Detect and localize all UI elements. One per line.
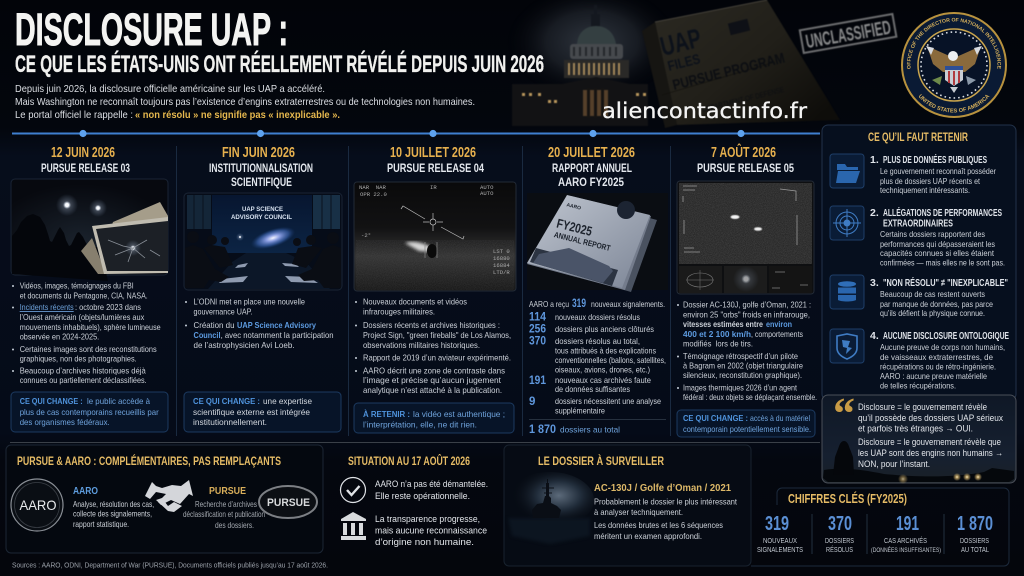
- subtitle: CE QUE LES ÉTATS-UNIS ONT RÉELLEMENT RÉVÉLÉ DEPUIS JUIN 2026: [15, 50, 544, 78]
- statistics list: oiseaux, avions, drones, etc.): [555, 364, 650, 374]
- heading: CE QU’IL FAUT RETENIR: [868, 130, 968, 144]
- transparency text: [375, 514, 487, 547]
- panel: situation au 17 aout 2026: [340, 453, 488, 547]
- statistics list: nouveaux dossiers résolus: [555, 312, 640, 322]
- image: annual report: ANNUAL REPORT: [553, 230, 612, 253]
- bullet list: [185, 296, 334, 350]
- item 1: plus de donnees publiques: 1.: [870, 154, 879, 166]
- quote text: les UAP sont des engins non humains →: [858, 448, 1003, 458]
- callout: ce qui change: [11, 392, 168, 432]
- image: advisory council room: ADVISORY COUNCIL: [231, 214, 292, 221]
- heading: SCIENTIFIQUE: [231, 177, 292, 189]
- statistics list: 256: [529, 324, 546, 336]
- bullet list: graphiques, non des photographies.: [20, 354, 137, 364]
- bullet list: l’image et précise qu’aucun jugement: [363, 375, 502, 385]
- callout: a retenir: À RETENIR :: [363, 409, 410, 419]
- icon: ODNI seal: UNITED STATES OF AMERICA: [919, 94, 990, 112]
- statistics list: dossiers nécessitent une analyse: [555, 396, 661, 406]
- panel: le dossier a surveiller: [504, 445, 751, 566]
- item 3: non resolu: 3.: [870, 277, 879, 289]
- bullet list: silencieux, reconstitution graphique).: [683, 370, 802, 380]
- callout: ce qui change: CE QUI CHANGE :: [683, 413, 748, 423]
- bullet list: , comportements: [751, 329, 803, 339]
- stat: dossiers resolus: 370: [828, 513, 852, 535]
- icon: check mark: [340, 478, 366, 502]
- date: 7 AOÛT 2026: [711, 143, 776, 161]
- callout: ce qui change: scientifique externe est intégrée: [193, 407, 310, 417]
- image: infrared video frame: AUTO: [480, 184, 494, 191]
- callout: ce qui change: des organismes fédéraux.: [20, 417, 110, 427]
- callout: ce qui change: CE QUI CHANGE :: [193, 396, 260, 406]
- callout: ce qui change: [184, 392, 341, 432]
- bullet list: [677, 300, 817, 402]
- timeline: [12, 130, 820, 137]
- quote text: Disclosure = le gouvernement révèle que: [858, 437, 1001, 447]
- image: infrared video frame: LTD/R: [493, 269, 510, 276]
- bullet list: Création du: [194, 320, 235, 330]
- bullet list: 400 et 2 100 km/h: [683, 329, 751, 339]
- item 1: plus de donnees publiques: Le gouvernement reconnaît posséder: [880, 166, 996, 176]
- folder title text: DEPARTMENT OF DEFENSE: [701, 85, 785, 114]
- heading: PURSUE RELEASE 04: [387, 163, 484, 175]
- item 3: non resolu: [830, 275, 1008, 318]
- statistics list: dossiers résolus au total,: [555, 336, 640, 346]
- quote text: NON, pour l’instant.: [858, 459, 930, 469]
- stat: nouveaux signalements: SIGNALEMENTS: [757, 547, 803, 554]
- bullet list: Images thermiques 2026 d’un agent: [683, 382, 798, 392]
- intro text: Depuis juin 2026, la disclosure officielle américaine sur les UAP a accéléré.: [15, 84, 325, 95]
- item 1: plus de donnees publiques: plus de dossiers UAP récents et: [880, 176, 981, 186]
- statistics list: conventionnelles (ballons, satellites,: [555, 355, 666, 365]
- bullet list: de l’astrophysicien Avi Loeb.: [194, 340, 294, 350]
- folder title text: [657, 23, 787, 114]
- callout: a retenir: [354, 403, 514, 433]
- callout: ce qui change: le public accède à: [87, 396, 150, 406]
- case text: AC-130J / Golfe d’Oman / 2021: [594, 483, 731, 494]
- stat: cas archives: (DONNÉES INSUFFISANTES): [871, 545, 941, 554]
- icon: folder: [830, 154, 864, 188]
- item 2: allegations de performances: 2.: [870, 207, 879, 219]
- PURSUE description: Recherche d’archives: [195, 499, 257, 509]
- bullet list: Certaines images sont des reconstitutions: [20, 344, 157, 354]
- bullet list: analytique n’est attaché à la publication.: [363, 385, 502, 395]
- statistics list: dossiers au total: [560, 424, 620, 434]
- image: annual report: AARO: [566, 202, 582, 212]
- item 4: aucune disclosure ontologique: Aucune preuve de corps non humains,: [880, 342, 1005, 352]
- bullet list: infrarouges militaires.: [363, 306, 435, 316]
- quote text: Disclosure = le gouvernement révèle: [858, 402, 987, 412]
- statistics list: AARO a reçu: [529, 299, 569, 309]
- folder title text: FILES: [666, 50, 702, 74]
- panel: pursue et aaro: [6, 445, 323, 553]
- image: infrared video frame: OPR 22.0: [360, 191, 387, 198]
- AARO description: collecte des signalements,: [73, 508, 152, 518]
- stat: cas archives: 191: [896, 513, 919, 535]
- intro text: Le portal officiel le rappelle :: [15, 110, 133, 121]
- callout: ce qui change: contemporain potentiellement sensible.: [683, 424, 811, 434]
- statistics list: nouveaux cas archivés faute: [555, 375, 651, 385]
- case text: Probablement le dossier le plus intéressant: [594, 496, 738, 506]
- bullet list: , avec notamment la participation: [221, 330, 334, 340]
- panel: ce qu'il faut retenir: [822, 125, 1016, 400]
- bullet list: AARO décrit une zone de contraste dans: [363, 366, 505, 376]
- item 2: allegations de performances: confirmées — mais elles ne le sont pas.: [880, 258, 1005, 268]
- icon: ODNI seal: [901, 12, 1007, 118]
- bullet list: observée en 2024-2025.: [20, 332, 99, 342]
- quote text: et parfois très étranges → OUI.: [858, 424, 973, 434]
- statistics list: 319: [572, 298, 586, 310]
- bullet list: Rapport de 2019 d’un aviateur expérimenté.: [363, 352, 511, 362]
- icon: institution: [341, 512, 366, 540]
- bullet list: Beaucoup d’archives historiques déjà: [20, 366, 146, 376]
- intro text: Mais Washington ne reconnaît toujours pas l’existence d’engins extraterrestres ou de technologies non humaines.: [15, 97, 475, 108]
- AARO description: [73, 485, 154, 529]
- bullet list: connues ou partiellement déclassifiées.: [20, 375, 147, 385]
- statistics list: 1 870: [529, 424, 556, 436]
- heading: CHIFFRES CLÉS (FY2025): [788, 491, 907, 506]
- callout: ce qui change: plus de cas contemporains recueillis par: [20, 407, 159, 417]
- PURSUE description: déclassification et publication: [183, 509, 265, 519]
- AARO description: Analyse, résolution des cas,: [73, 499, 154, 509]
- bullet list: : octobre 2023 dans: [75, 302, 141, 312]
- icon: ODNI seal: OFFICE OF THE DIRECTOR OF NATIONAL INTELLIGENCE: [906, 18, 1002, 69]
- heading: [209, 163, 313, 189]
- panel: fin juin 2026: [184, 145, 342, 432]
- bullet list: environ: [766, 319, 792, 329]
- callout: ce qui change: institutionnellement.: [193, 417, 267, 427]
- item 3: non resolu: par manque de données, pas parce: [880, 299, 993, 309]
- bullet list: et documents du Pentagone, CIA, NASA.: [20, 290, 148, 300]
- statistics list: supplémentaire: [555, 406, 605, 416]
- watermark: aliencontactinfo.fr: [602, 99, 807, 123]
- bullet list: Vidéos, images, témoignages du FBI: [20, 280, 134, 290]
- item 1: plus de donnees publiques: [830, 153, 996, 195]
- heading: RAPPORT ANNUEL: [552, 163, 632, 175]
- item 1: plus de donnees publiques: techniquement intéressants.: [880, 185, 970, 195]
- bullet list: L’ODNI met en place une nouvelle: [194, 296, 305, 306]
- bullet list: Dossier AC-130J, golfe d’Oman, 2021 :: [683, 300, 811, 310]
- stat: nouveaux signalements: NOUVEAUX: [763, 538, 797, 545]
- image: infrared video frame: [354, 182, 516, 291]
- image: infrared video frame: 16880: [493, 255, 510, 262]
- status text: [375, 479, 488, 501]
- stat: dossiers au total: [957, 513, 993, 554]
- image: infrared video frame: AUTO: [480, 190, 494, 197]
- image: infrared video frame: NAR NAR: [359, 184, 386, 191]
- icon: quotation mark: “: [833, 389, 855, 438]
- sources: Sources : AARO, ODNI, Department of War (PURSUE), Documents officiels publiés jusqu’au 17 août 2026.: [12, 560, 328, 570]
- statistics list: 370: [529, 336, 546, 348]
- image: advisory council room: [184, 193, 342, 290]
- item 4: aucune disclosure ontologique: de telles récupérations.: [880, 380, 956, 390]
- stat: nouveaux signalements: [757, 513, 803, 554]
- stat: cas archives: CAS ARCHIVÉS: [884, 536, 927, 545]
- bullet list: modifiés lors de tirs.: [683, 338, 753, 348]
- image: advisory council room: UAP SCIENCE: [242, 206, 284, 213]
- bullet list: Council: [194, 330, 220, 340]
- stat: dossiers resolus: [825, 513, 854, 554]
- icon: PURSUE logo: [259, 486, 317, 518]
- panel: 10 juillet 2026: [354, 145, 516, 433]
- icon: shield: [830, 329, 864, 363]
- case text: [594, 483, 738, 541]
- status text: AARO n’a pas été démantelée.: [375, 479, 488, 489]
- panel: quote on disclosure: [822, 389, 1016, 484]
- bullet list: Dossiers récents et archives historiques :: [363, 320, 500, 330]
- heading: [552, 163, 632, 189]
- heading: LE DOSSIER À SURVEILLER: [538, 453, 664, 468]
- title: DISCLOSURE UAP :: [15, 4, 288, 55]
- transparency text: La transparence progresse,: [375, 514, 480, 524]
- bullet list: à Bagram en 2002 (objet triangulaire: [683, 360, 803, 370]
- header image: Capitol at night: [508, 0, 676, 126]
- icon: database: [830, 275, 864, 309]
- callout: ce qui change: une expertise: [263, 396, 312, 406]
- case text: Les données brutes et les 6 séquences: [594, 520, 723, 530]
- header image: UAP files folder: [642, 0, 840, 128]
- date: 10 JUILLET 2026: [390, 145, 476, 161]
- item 4: aucune disclosure ontologique: [830, 329, 1009, 390]
- image: infrared video frame: 16884: [493, 262, 510, 269]
- callout: ce qui change: CE QUI CHANGE :: [20, 396, 83, 406]
- statistics list: [529, 298, 666, 436]
- bullet list: Nouveaux documents et vidéos: [363, 296, 467, 306]
- bullet list: vitesses estimées entre: [683, 319, 763, 329]
- transparency text: d’origine non humaine.: [375, 537, 474, 547]
- heading: PURSUE & AARO : COMPLÉMENTAIRES, PAS REMPLAÇANTS: [17, 453, 281, 468]
- PURSUE description: [183, 485, 265, 530]
- transparency text: mais aucune reconnaissance: [375, 526, 487, 536]
- panel: chiffres cles: [751, 488, 1009, 566]
- image: lights over trees and photos: [11, 179, 168, 281]
- item 2: allegations de performances: capacités connues si elles étaient: [880, 248, 995, 258]
- bullet list: Incidents récents: [20, 302, 74, 312]
- intro text: « non résolu » ne signifie pas « inexplicable ».: [135, 110, 340, 121]
- status text: Elle reste opérationnelle.: [375, 491, 470, 501]
- statistics list: 114: [529, 312, 547, 324]
- bullet list: [355, 296, 511, 395]
- item 4: aucune disclosure ontologique: AARO : aucune preuve matérielle: [880, 371, 987, 381]
- statistics list: nouveaux signalements.: [591, 299, 665, 309]
- panel: 20 juillet 2026: [527, 145, 668, 436]
- bullet list: Témoignage rétrospectif d’un pilote: [683, 351, 798, 361]
- stamp: unclassified: [800, 14, 897, 54]
- icon: AARO logo: [11, 479, 63, 531]
- statistics list: tous attribués à des explications: [555, 346, 656, 356]
- AARO description: AARO: [73, 485, 98, 497]
- callout: ce qui change: [677, 410, 815, 437]
- callout: a retenir: la vidéo est authentique ;: [413, 409, 505, 419]
- bullet list: [12, 280, 161, 385]
- stat: dossiers au total: 1 870: [957, 513, 993, 535]
- callout: ce qui change: accès à du matériel: [750, 413, 810, 423]
- image: warship at sea: [506, 472, 594, 544]
- item 4: aucune disclosure ontologique: de vaisseaux extraterrestres, de: [880, 352, 993, 362]
- image: annual report: FY2025: [555, 216, 594, 239]
- case text: méritent un examen approfondi.: [594, 531, 702, 541]
- folder title text: PURSUE PROGRAM: [671, 51, 787, 94]
- bullet list: environ 25 "orbs" froids en infrarouge,: [683, 310, 810, 320]
- callout: a retenir: l’interprétation, elle, ne dit rien.: [363, 420, 477, 430]
- item 2: allegations de performances: Certains dossiers rapportent des: [880, 229, 985, 239]
- stat: dossiers au total: AU TOTAL: [961, 547, 989, 554]
- statistics list: de données suffisantes: [555, 384, 630, 394]
- heading: PURSUE RELEASE 05: [697, 163, 794, 175]
- item 2: allegations de performances: performances qui dépasseraient les: [880, 239, 995, 249]
- image: thermal video frames: [677, 181, 814, 294]
- image: annual report: [527, 193, 668, 292]
- date: 12 JUIN 2026: [51, 145, 115, 161]
- icon: AARO logo: AARO: [20, 497, 57, 513]
- bullet list: mouvements inhabituels), sphère lumineuse: [20, 322, 161, 332]
- heading: SITUATION AU 17 AOÛT 2026: [348, 453, 470, 468]
- stat: nouveaux signalements: 319: [765, 513, 789, 535]
- case text: à analyser techniquement.: [594, 507, 683, 517]
- bullet list: Project Sign, "green fireballs" de Los Alamos,: [363, 330, 511, 340]
- panel: 7 aout 2026: [677, 143, 817, 437]
- item 3: non resolu: qu’ils défient la physique connue.: [880, 308, 985, 318]
- image: infrared video frame: -2°: [361, 232, 371, 239]
- icon: handshake: [145, 480, 193, 512]
- statistics list: 9: [529, 396, 535, 408]
- item 4: aucune disclosure ontologique: récupérations ou de rétro-ingénierie.: [880, 362, 996, 372]
- quote text: qu’il possède des dossiers UAP sérieux: [858, 413, 1003, 423]
- image: infrared video frame: LST 0: [493, 248, 510, 255]
- bullet list: UAP Science Advisory: [237, 320, 316, 330]
- intro text: [15, 84, 475, 121]
- folder title text: UAP: [657, 23, 704, 62]
- item 2: allegations de performances: [830, 206, 1005, 268]
- bullet list: l’Ouest américain (objets/lumières aux: [20, 312, 145, 322]
- quote text: [858, 402, 1003, 469]
- item 2: allegations de performances: EXTRAORDINAIRES: [883, 218, 953, 230]
- stat: dossiers resolus: DOSSIERS: [825, 538, 854, 545]
- PURSUE description: des dossiers.: [215, 520, 254, 530]
- stat: cas archives: [871, 513, 941, 554]
- image: infrared video frame: IR: [430, 184, 437, 191]
- stamp: unclassified: UNCLASSIFIED: [804, 18, 893, 53]
- heading: PURSUE RELEASE 03: [41, 163, 130, 175]
- icon: PURSUE logo: PURSUE: [267, 497, 310, 509]
- date: 20 JUILLET 2026: [548, 145, 635, 161]
- AARO description: rapport statistique.: [73, 519, 129, 529]
- bullet list: fédéral : deux objets se déplaçant ensemble.: [683, 392, 817, 402]
- stat: dossiers resolus: RÉSOLUS: [826, 545, 853, 554]
- statistics list: 191: [529, 375, 547, 387]
- panel: 12 juin 2026: [11, 145, 168, 432]
- item 4: aucune disclosure ontologique: 4.: [870, 330, 879, 342]
- date: FIN JUIN 2026: [222, 145, 295, 161]
- item 3: non resolu: Beaucoup de cas restent ouverts: [880, 289, 985, 299]
- heading: AARO FY2025: [558, 177, 625, 189]
- icon: radar target: [830, 206, 864, 240]
- stat: dossiers au total: DOSSIERS: [960, 538, 989, 545]
- PURSUE description: PURSUE: [209, 485, 246, 497]
- statistics list: dossiers plus anciens clôturés: [555, 324, 654, 334]
- bullet list: gouvernance UAP.: [194, 306, 252, 316]
- heading: INSTITUTIONNALISATION: [209, 163, 313, 175]
- landscape and silhouette: [823, 441, 1014, 484]
- bullet list: observations militaires historiques.: [363, 340, 480, 350]
